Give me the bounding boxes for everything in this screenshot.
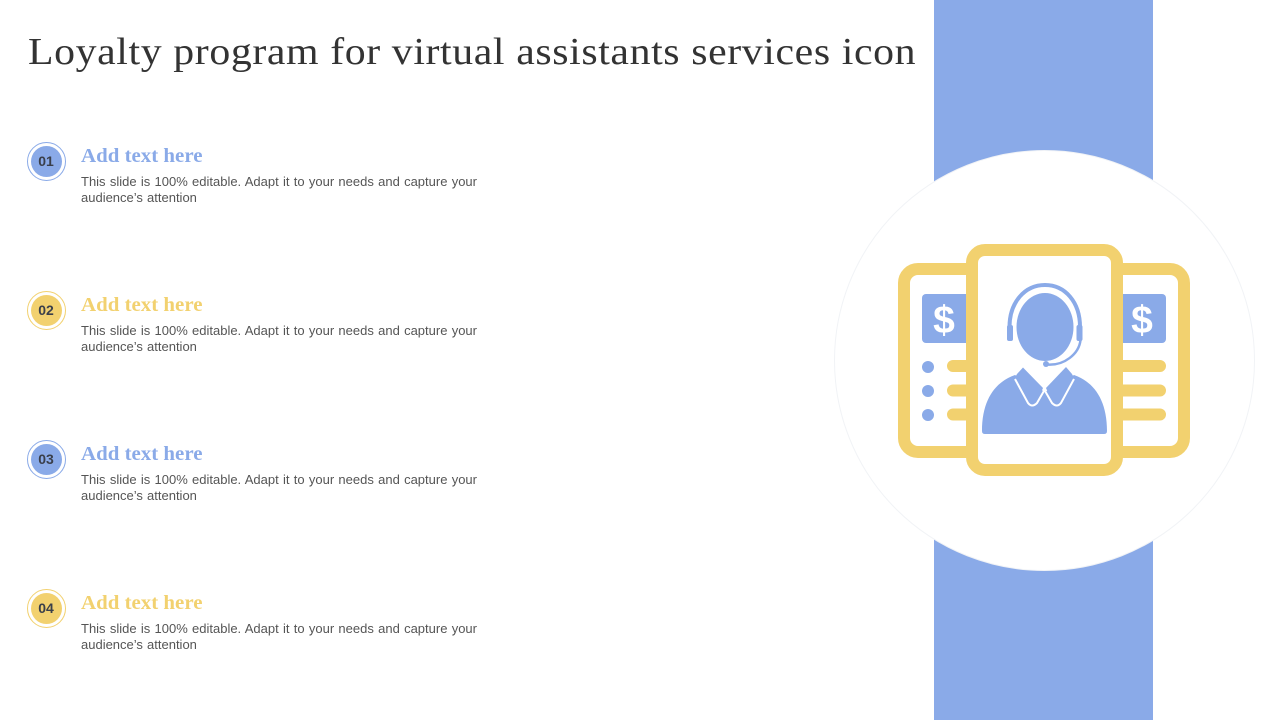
badge 03 xyxy=(27,440,66,479)
list item 01 xyxy=(27,142,477,205)
list item 03 xyxy=(27,440,477,503)
blue vertical band xyxy=(934,0,1153,720)
icon: front card xyxy=(972,250,1117,470)
body text 02: This slide is 100% editable. Adapt it to your needs and capture your audience’s attention xyxy=(81,323,477,354)
badge 04 xyxy=(27,589,66,628)
icon: left dollar tag xyxy=(922,294,972,343)
body text 01: This slide is 100% editable. Adapt it to your needs and capture your audience’s attention xyxy=(81,174,477,205)
list item 02 xyxy=(27,291,477,354)
icon: left list rows xyxy=(922,361,975,421)
badge 01: 01 xyxy=(38,153,54,169)
icon: right dollar tag xyxy=(1116,294,1166,343)
title: Loyalty program for virtual assistants services icon xyxy=(28,31,916,73)
badge 02 xyxy=(27,291,66,330)
heading 02: Add text here xyxy=(81,294,203,316)
icon: right dollar tag: $ xyxy=(1131,299,1153,342)
badge 02: 02 xyxy=(38,302,54,318)
icon: left dollar tag: $ xyxy=(933,299,955,342)
badge 04: 04 xyxy=(38,600,54,616)
icon: back cards outline xyxy=(904,269,1184,452)
white circle xyxy=(834,150,1255,571)
body text 03: This slide is 100% editable. Adapt it to your needs and capture your audience’s attention xyxy=(81,472,477,503)
badge 03: 03 xyxy=(38,451,54,467)
badge 01 xyxy=(27,142,66,181)
icon: right list rows xyxy=(1115,366,1160,414)
heading 04: Add text here xyxy=(81,592,203,614)
list item 04 xyxy=(27,589,477,652)
heading 03: Add text here xyxy=(81,443,203,465)
body text 04: This slide is 100% editable. Adapt it to your needs and capture your audience’s attention xyxy=(81,621,477,652)
heading 01: Add text here xyxy=(81,145,203,167)
icon: assistant with headset xyxy=(982,285,1107,434)
